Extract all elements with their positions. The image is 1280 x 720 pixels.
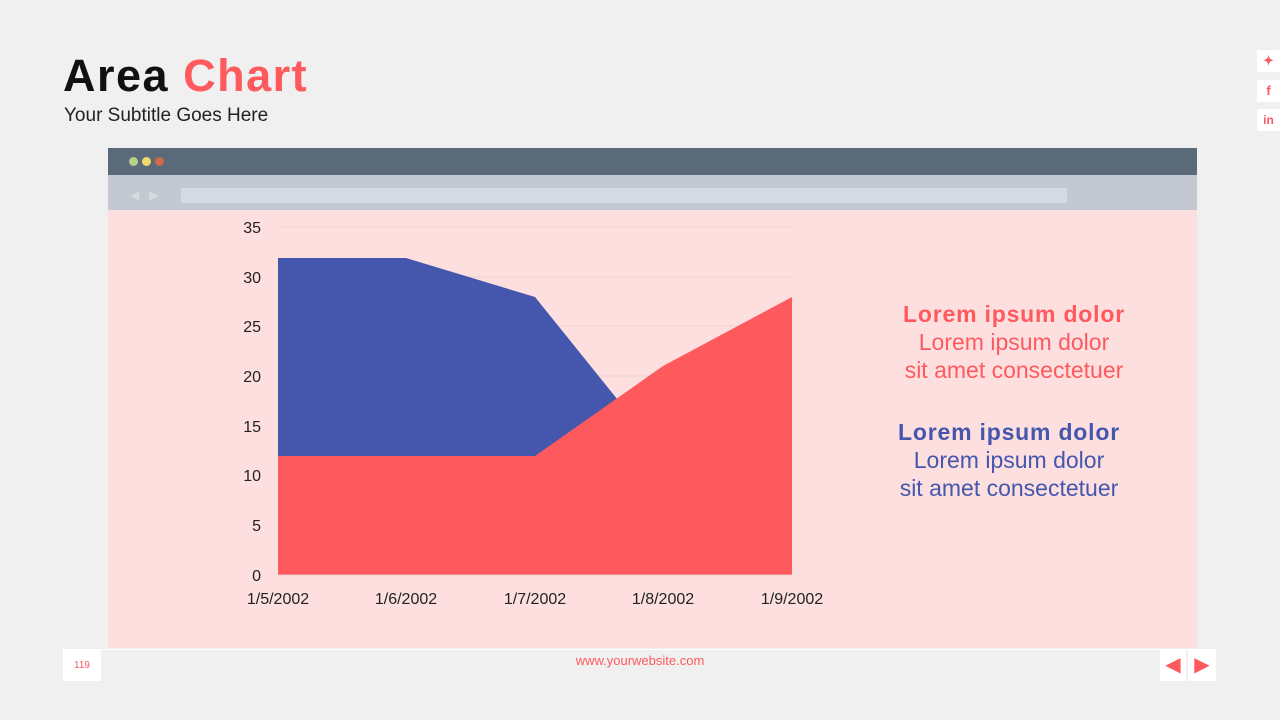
text block: red: Lorem ipsum dolor	[903, 301, 1125, 327]
area chart: 30	[243, 270, 261, 287]
area chart: 1/5/2002	[247, 591, 309, 608]
area chart: 1/6/2002	[375, 591, 437, 608]
text block: blue	[898, 419, 1120, 501]
area chart: 1/9/2002	[761, 591, 823, 608]
nav arrows: ▶	[1194, 654, 1210, 676]
icon: twitter: ✦	[1263, 53, 1274, 68]
area chart: 15	[243, 419, 261, 436]
title bar	[108, 148, 1197, 175]
area chart: 20	[243, 369, 261, 386]
text block: blue: sit amet consectetuer	[900, 475, 1118, 501]
subtitle: Your Subtitle Goes Here	[64, 105, 268, 126]
area chart: 25	[243, 319, 261, 336]
text block: red: sit amet consectetuer	[905, 357, 1123, 383]
text block: red: Lorem ipsum dolor	[919, 329, 1109, 355]
address bar	[108, 175, 1197, 210]
area chart: 0	[252, 568, 261, 585]
nav arrows: ◀	[1165, 654, 1181, 676]
browser window panel	[108, 148, 1197, 648]
nav arrows	[1160, 650, 1216, 681]
area chart: 5	[252, 518, 261, 535]
footer line	[63, 649, 1216, 650]
page number	[63, 650, 101, 681]
area chart: 1/7/2002	[504, 591, 566, 608]
text block: blue: Lorem ipsum dolor	[898, 419, 1120, 445]
icon: linkedin	[1257, 109, 1280, 131]
icon: twitter	[1257, 50, 1280, 72]
area chart: 10	[243, 468, 261, 485]
icon: facebook: f	[1266, 83, 1271, 98]
title: Area Chart	[63, 50, 308, 101]
area chart: 1/8/2002	[632, 591, 694, 608]
page number: 119	[74, 660, 90, 671]
address bar: ◀ ▶	[130, 188, 158, 202]
text block: red	[903, 301, 1125, 383]
area chart: 35	[243, 220, 261, 237]
icon: linkedin: in	[1263, 113, 1274, 127]
text block: blue: Lorem ipsum dolor	[914, 447, 1104, 473]
social icons	[1257, 50, 1280, 131]
icon: facebook	[1257, 80, 1280, 102]
website: www.yourwebsite.com	[576, 653, 704, 668]
